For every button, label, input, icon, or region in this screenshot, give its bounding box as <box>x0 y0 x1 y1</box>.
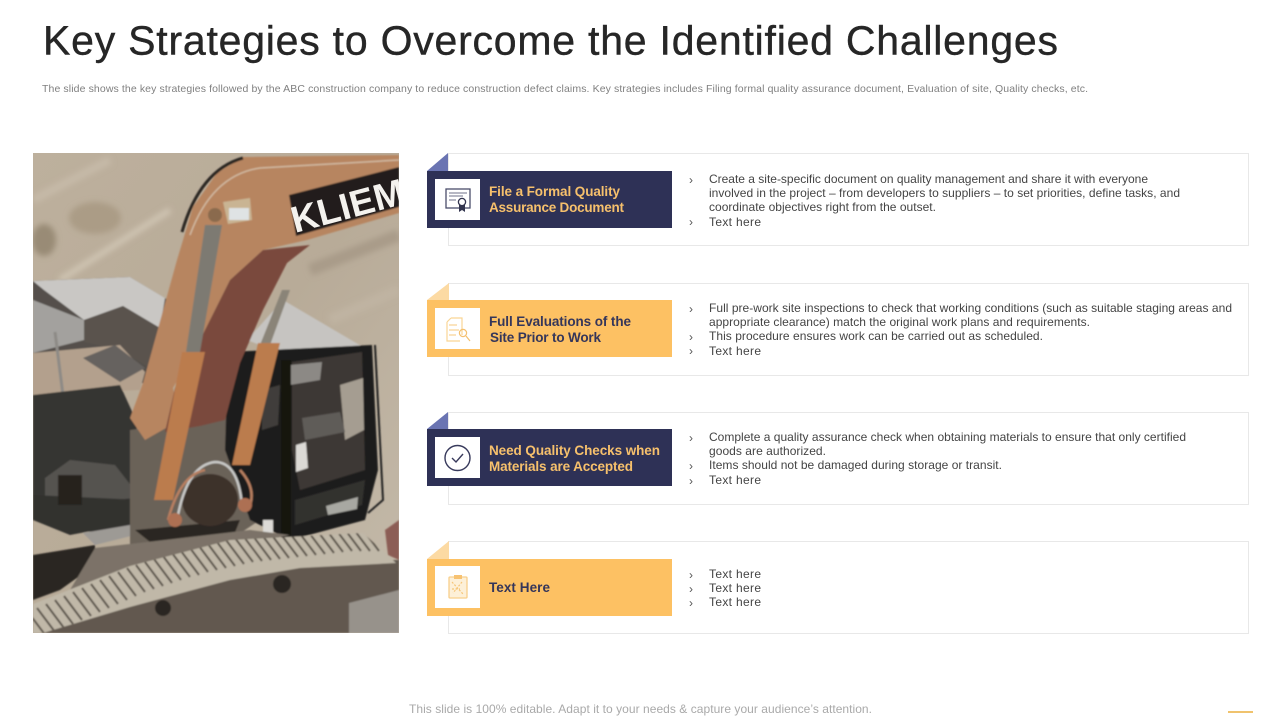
hydraulic cylinders <box>186 225 222 352</box>
footer accent line <box>1228 711 1253 713</box>
hand rail <box>54 332 64 392</box>
icon: document with magnifier <box>435 308 480 349</box>
bullet list: appropriate clearance) match the original work plans and requirements. <box>709 315 1090 329</box>
bullet list: › <box>689 582 693 596</box>
centre chassis <box>130 415 260 545</box>
panel: text here <box>427 541 1248 634</box>
bullet list: › <box>689 302 693 316</box>
heading text: Assurance Document <box>489 200 624 215</box>
footer note: This slide is 100% editable. Adapt it to your needs & capture your audience’s attention. <box>409 702 872 716</box>
name plate <box>289 167 399 236</box>
heading text: Site Prior to Work <box>490 330 601 345</box>
bullet list <box>689 430 1186 488</box>
track shoes <box>33 533 396 633</box>
bullet list: Full pre-work site inspections to check that working conditions (such as suitable staging areas and <box>709 301 1232 315</box>
bullet list: goods are authorized. <box>709 444 826 458</box>
heading bar <box>427 559 672 616</box>
bullet list <box>689 172 1180 229</box>
bullet list: Items should not be damaged during storage or transit. <box>709 458 1002 472</box>
bullet list: › <box>689 330 693 344</box>
heading text: File a Formal Quality <box>489 184 620 199</box>
heading text: Need Quality Checks when <box>489 443 660 458</box>
bullet list: Text here <box>709 595 761 609</box>
cabin <box>225 345 378 540</box>
boom dark plate <box>165 245 310 432</box>
bullet list: Complete a quality assurance check when obtaining materials to ensure that only certified <box>709 430 1186 444</box>
bullet list: › <box>689 215 693 229</box>
heading text <box>489 443 660 474</box>
hydraulic hoses <box>182 474 238 526</box>
panel: file a formal quality assurance document <box>427 153 1248 246</box>
bullet list: › <box>689 474 693 488</box>
bullet list: Create a site-specific document on quality management and share it with everyone <box>709 172 1148 186</box>
bullet list: Text here <box>709 581 761 595</box>
icon: clipboard <box>435 566 480 608</box>
boom arm <box>130 155 399 440</box>
bullet list: › <box>689 344 693 358</box>
bullet list: involved in the project – from developers to suppliers – to set priorities, define tasks, and <box>709 186 1180 200</box>
work lamp <box>223 198 252 224</box>
bullet list <box>689 301 1232 358</box>
corner fold <box>427 283 449 300</box>
bullet list: Text here <box>709 473 761 487</box>
card outline <box>448 284 1248 376</box>
name plate lettering: KLIEM <box>286 171 409 241</box>
icon: certificate <box>435 179 480 220</box>
corner fold <box>427 153 448 171</box>
bullet list: › <box>689 173 693 187</box>
bullet list: › <box>689 459 693 473</box>
dark body deck <box>33 384 138 532</box>
bullet list: › <box>689 596 693 610</box>
cables on boom <box>182 158 243 232</box>
bullet list: › <box>689 431 693 445</box>
bullet list <box>689 567 761 610</box>
heading text <box>489 314 631 345</box>
heading text: Text Here <box>489 580 550 595</box>
card outline <box>448 542 1248 634</box>
left engine housing <box>33 277 168 385</box>
undercarriage <box>33 560 399 633</box>
corner fold <box>427 412 448 429</box>
subtitle description: The slide shows the key strategies followed by the ABC construction company to reduce construction defect claims. Key strategies includes Filing formal quality assurance document, Evaluation of site, Quality checks, etc. <box>42 83 1088 95</box>
panel: full evaluations of the site prior to work <box>427 283 1248 376</box>
cabin roof <box>248 302 361 351</box>
icon: check mark circle <box>435 437 480 478</box>
bullet list: coordinate objectives right from the outset. <box>709 200 936 214</box>
heading text: Materials are Accepted <box>489 459 633 474</box>
bullet list: This procedure ensures work can be carried out as scheduled. <box>709 329 1043 343</box>
title: Key Strategies to Overcome the Identified Challenges <box>43 18 1058 64</box>
card outline <box>448 412 1248 504</box>
bullet list: › <box>689 568 693 582</box>
heading text <box>489 184 624 215</box>
bullet list: Text here <box>709 215 761 229</box>
heading text: Full Evaluations of the <box>489 314 631 329</box>
bullet list: Text here <box>709 567 761 581</box>
heading bar <box>427 300 672 357</box>
corner fold <box>427 541 449 559</box>
photo: excavator on a construction site <box>28 153 409 636</box>
heading bar <box>427 429 672 486</box>
panel: need quality checks when materials are accepted <box>427 412 1248 504</box>
bullet list: Text here <box>709 344 761 358</box>
card outline <box>448 154 1248 246</box>
heading bar <box>427 171 672 228</box>
